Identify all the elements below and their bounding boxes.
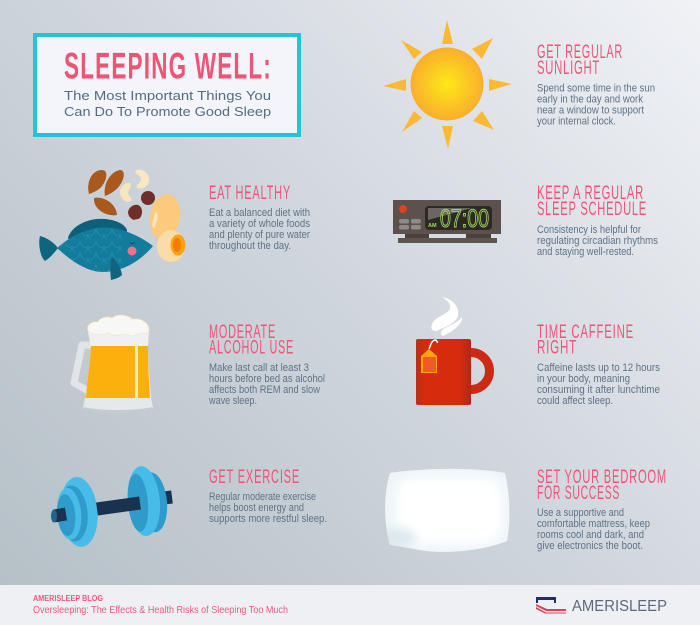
section: get regular sunlight: SUNLIGHT [537, 58, 600, 79]
icon: cashews [120, 170, 149, 202]
icon: sun [383, 20, 512, 149]
section: set your bedroom for success [537, 467, 667, 552]
section: eat healthy: EAT HEALTHY [209, 183, 291, 204]
section: get regular sunlight [537, 42, 655, 128]
section: eat healthy: throughout the day. [209, 240, 291, 252]
section: moderate alcohol use: affects both REM and slow [209, 384, 320, 396]
section: time caffeine right: in your body, meaning [537, 373, 630, 385]
section: keep a regular sleep schedule: Consistency is helpful for [537, 224, 641, 236]
subtitle [64, 88, 271, 119]
icon: alarm clock [393, 200, 501, 243]
section: keep a regular sleep schedule: and staying well-rested. [537, 246, 634, 258]
section: time caffeine right: TIME CAFFEINE [537, 322, 634, 343]
title box [35, 35, 299, 135]
section: get regular sunlight: early in the day and work [537, 94, 644, 106]
section: set your bedroom for success: Use a supportive and [537, 507, 624, 519]
section: get regular sunlight: near a window to support [537, 104, 644, 116]
section: time caffeine right [537, 322, 660, 407]
section: get exercise: Regular moderate exercise [209, 491, 316, 503]
subtitle: Can Do To Promote Good Sleep [64, 104, 271, 119]
section: get exercise [209, 467, 327, 525]
section: get exercise: GET EXERCISE [209, 467, 300, 488]
icon: alarm clock: AM [428, 223, 437, 229]
section: time caffeine right: could affect sleep. [537, 395, 613, 407]
logo: AMERISLEEP [572, 598, 667, 615]
section: get regular sunlight: Spend some time in the sun [537, 82, 655, 94]
beer foam [88, 315, 149, 336]
section: keep a regular sleep schedule [537, 183, 658, 258]
footer [0, 585, 700, 625]
section: eat healthy: Eat a balanced diet with [209, 207, 310, 219]
section: set your bedroom for success: comfortable mattress, keep [537, 518, 650, 530]
section: set your bedroom for success: FOR SUCCESS [537, 483, 620, 504]
icon: fish and healthy foods [39, 170, 185, 280]
section: moderate alcohol use: ALCOHOL USE [209, 338, 294, 358]
logo [536, 597, 667, 615]
clock time: 07:00 [440, 205, 489, 233]
footer link text [33, 594, 288, 616]
section: get exercise: supports more restful sleep. [209, 513, 327, 525]
section: eat healthy [209, 183, 310, 252]
title: SLEEPING WELL: [64, 46, 272, 86]
section: time caffeine right: consuming it after lunchtime [537, 384, 660, 396]
section: get regular sunlight: GET REGULAR [537, 42, 623, 63]
icon: beer mug [74, 315, 153, 413]
section: time caffeine right: RIGHT [537, 338, 577, 358]
section: set your bedroom for success: rooms cool and dark, and [537, 529, 644, 541]
section: eat healthy: and plenty of pure water [209, 229, 310, 241]
section: moderate alcohol use [208, 322, 325, 407]
icon: egg [146, 192, 186, 262]
footer link text: Oversleeping: The Effects & Health Risks of Sleeping Too Much [33, 604, 288, 616]
footer link text: AMERISLEEP BLOG [33, 594, 103, 603]
icon: pillow [376, 469, 509, 552]
section: get exercise: helps boost energy and [209, 502, 304, 514]
icon: hazelnuts [128, 191, 155, 220]
section: get regular sunlight: your internal clock. [537, 116, 616, 128]
icon: almonds [88, 170, 124, 215]
section: moderate alcohol use: wave sleep. [208, 395, 257, 407]
section: time caffeine right: Caffeine lasts up to 12 hours [537, 362, 660, 374]
section: moderate alcohol use: MODERATE [209, 322, 276, 343]
icon: steam [431, 297, 462, 336]
section: keep a regular sleep schedule: regulating circadian rhythms [537, 235, 658, 247]
subtitle: The Most Important Things You [64, 88, 271, 103]
icon: fish [39, 219, 153, 280]
icon: dumbbell [51, 464, 172, 549]
section: moderate alcohol use: hours before bed as alcohol [209, 373, 325, 385]
section: eat healthy: a variety of whole foods [209, 218, 310, 230]
section: moderate alcohol use: Make last call at least 3 [209, 362, 309, 374]
icon: coffee mug with tea tag [416, 297, 490, 405]
icon: tea tag [421, 349, 437, 373]
section: set your bedroom for success: give electronics the boot. [537, 540, 643, 552]
